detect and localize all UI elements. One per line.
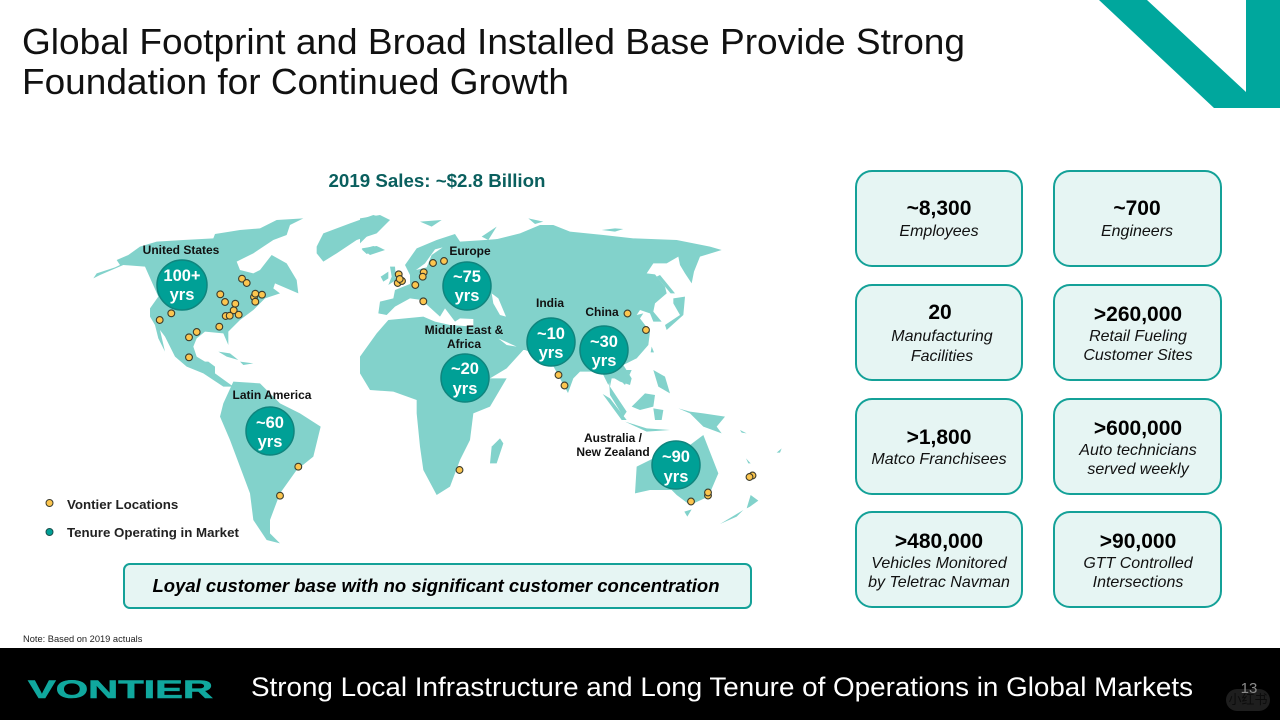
- tenure bubble: China: [580, 326, 628, 374]
- stat card: controlled intersections: GTT Controlled: [1083, 555, 1194, 572]
- footer message: Strong Local Infrastructure and Long Tenure of Operations in Global Markets: [251, 672, 1193, 702]
- stat card: manufacturing facilities: 20: [928, 301, 952, 324]
- region labels: India: [536, 296, 564, 310]
- stat card: controlled intersections: Intersections: [1093, 574, 1183, 591]
- stat card: manufacturing facilities: Facilities: [911, 348, 973, 365]
- watermark: 小红书: [1228, 692, 1268, 707]
- tenure bubble: Australia: [652, 441, 700, 489]
- stat card: retail fueling sites: Customer Sites: [1083, 347, 1193, 364]
- stat card: engineers: ~700: [1113, 197, 1161, 220]
- region labels: China: [585, 305, 619, 319]
- region labels: New Zealand: [576, 445, 650, 459]
- stat card: vehicles monitored: Vehicles Monitored: [871, 555, 1008, 572]
- stat card: auto technicians: [1054, 399, 1221, 494]
- stat card: controlled intersections: >90,000: [1100, 530, 1176, 553]
- stat card: vehicles monitored: by Teletrac Navman: [868, 574, 1010, 591]
- tenure bubble: Middle East and Africa: [441, 354, 489, 402]
- region labels: Middle East &: [425, 323, 504, 337]
- legend: [46, 497, 239, 540]
- tenure bubble: India: yrs: [539, 344, 563, 362]
- tenure bubble: China: ~30: [590, 333, 618, 351]
- title: Foundation for Continued Growth: [22, 61, 569, 102]
- region labels: Latin America: [233, 388, 312, 402]
- stat card: engineers: Engineers: [1101, 223, 1173, 240]
- stat card: employees: Employees: [899, 223, 979, 240]
- stat card: retail fueling sites: Retail Fueling: [1089, 328, 1187, 345]
- legend: Vontier Locations: [67, 497, 178, 512]
- callout: [124, 564, 751, 608]
- tenure bubble: United States: 100+: [163, 267, 201, 285]
- tenure bubble: Europe: yrs: [455, 287, 479, 305]
- tenure bubble: China: yrs: [592, 352, 616, 370]
- stat card: employees: [856, 171, 1022, 266]
- tenure bubble: Middle East and Africa: ~20: [451, 360, 479, 378]
- legend: Tenure Operating in Market: [67, 525, 239, 540]
- region labels: Europe: [449, 244, 491, 258]
- stat card: auto technicians: Auto technicians: [1078, 442, 1197, 459]
- tenure bubble: United States: yrs: [170, 286, 194, 304]
- stat card: auto technicians: served weekly: [1087, 461, 1190, 478]
- stat card: retail fueling sites: >260,000: [1094, 303, 1182, 326]
- tenure bubble: Europe: [443, 262, 491, 310]
- stat card: engineers: [1054, 171, 1221, 266]
- tenure bubble: Latin America: ~60: [256, 414, 284, 432]
- tenure bubble: United States: [157, 260, 207, 310]
- callout: Loyal customer base with no significant customer concentration: [152, 575, 720, 596]
- title: Global Footprint and Broad Installed Base Provide Strong: [22, 21, 965, 62]
- tenure bubble: Australia: ~90: [662, 448, 690, 466]
- stat card: auto technicians: >600,000: [1094, 417, 1182, 440]
- stat card: Matco franchisees: [856, 399, 1022, 494]
- corner logo mark: [1099, 0, 1280, 108]
- tenure bubble: India: [527, 318, 575, 366]
- title: [22, 21, 965, 102]
- region labels: Africa: [447, 337, 481, 351]
- world map: [93, 215, 782, 543]
- tenure bubble: Latin America: [246, 407, 294, 455]
- stat card: retail fueling sites: [1054, 285, 1221, 380]
- watermark: [1226, 689, 1270, 711]
- tenure bubble: Europe: ~75: [453, 268, 481, 286]
- stat card: Matco franchisees: >1,800: [907, 426, 971, 449]
- region labels: United States: [143, 243, 220, 257]
- footer bar: [0, 648, 1280, 720]
- tenure bubble: Australia: yrs: [664, 468, 688, 486]
- stat card: Matco franchisees: Matco Franchisees: [871, 451, 1007, 468]
- tenure bubble: Middle East and Africa: yrs: [453, 380, 477, 398]
- tenure bubble: India: ~10: [537, 325, 565, 343]
- Vontier logo: VONTIER: [28, 676, 213, 704]
- stat card: vehicles monitored: >480,000: [895, 530, 983, 553]
- stat card: vehicles monitored: [856, 512, 1022, 607]
- stat card: controlled intersections: [1054, 512, 1221, 607]
- region labels: Australia /: [584, 431, 643, 445]
- tenure bubble: Latin America: yrs: [258, 433, 282, 451]
- page number: 13: [1241, 680, 1257, 697]
- region labels: [143, 243, 650, 459]
- sales heading: 2019 Sales: ~$2.8 Billion: [328, 171, 546, 191]
- stat card: employees: ~8,300: [907, 197, 971, 220]
- footnote: Note: Based on 2019 actuals: [23, 634, 143, 644]
- stat card: manufacturing facilities: [856, 285, 1022, 380]
- stat card: manufacturing facilities: Manufacturing: [891, 328, 993, 345]
- location dots: [156, 258, 756, 505]
